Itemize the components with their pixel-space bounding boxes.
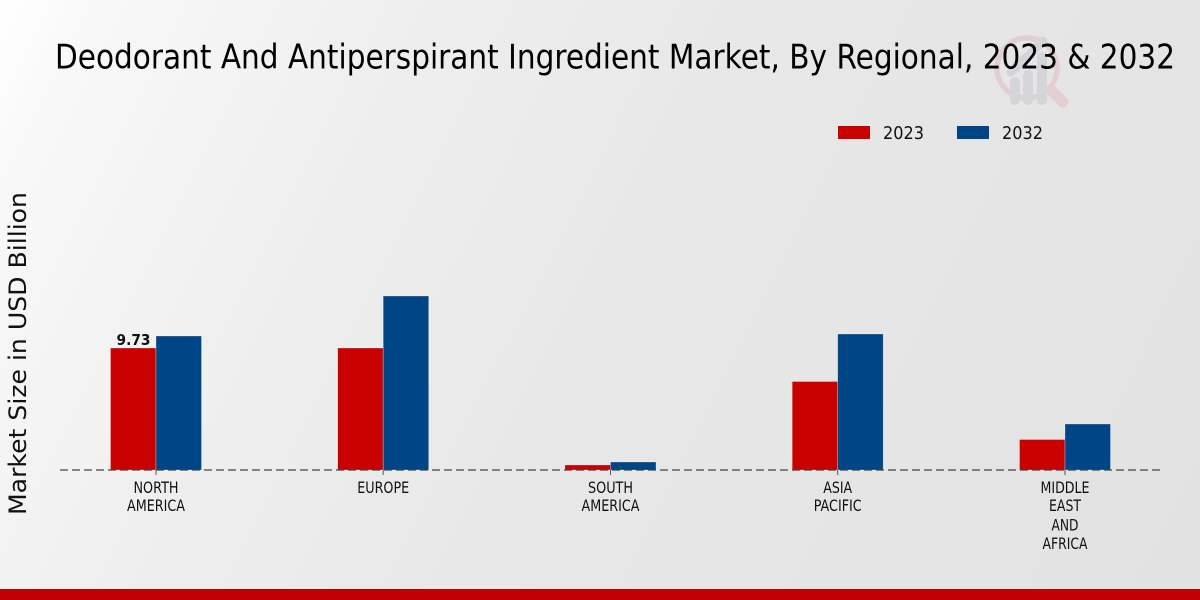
data label: 9.73: [116, 331, 150, 349]
legend item: 2023: [838, 123, 924, 144]
category label: North America: [127, 478, 185, 515]
category label: North America: AMERICA: [127, 496, 185, 515]
bars: South America: [565, 462, 656, 470]
bars: Asia Pacific: [792, 334, 883, 470]
category label: Asia Pacific: ASIA: [823, 478, 852, 497]
category label: Asia Pacific: PACIFIC: [814, 496, 862, 515]
bars: Middle East and Africa: [1020, 424, 1110, 470]
footer bar: [0, 589, 1200, 600]
category label: South America: [582, 478, 640, 515]
bars: Europe: [338, 296, 429, 470]
legend item: 2032: 2032: [1002, 123, 1043, 144]
legend item: 2023: 2023: [883, 123, 924, 144]
category label: Middle East and Africa: EAST: [1049, 496, 1081, 515]
bar chart: [60, 296, 1160, 553]
category label: Middle East and Africa: AFRICA: [1042, 534, 1088, 553]
category label: Europe: EUROPE: [357, 478, 409, 497]
bars: North America: [110, 336, 202, 470]
category label: Asia Pacific: [814, 478, 862, 515]
category label: Middle East and Africa: [1040, 478, 1090, 553]
legend: [838, 123, 1043, 144]
category label: Middle East and Africa: MIDDLE: [1040, 478, 1090, 497]
legend item: 2032: [957, 123, 1043, 144]
y-axis title: Market Size in USD Billion: [4, 192, 32, 515]
category label: North America: NORTH: [134, 478, 178, 497]
category label: South America: SOUTH: [588, 478, 633, 497]
category label: Middle East and Africa: AND: [1052, 516, 1078, 534]
icon: watermark logo: [997, 38, 1063, 105]
category label: South America: AMERICA: [582, 496, 640, 515]
